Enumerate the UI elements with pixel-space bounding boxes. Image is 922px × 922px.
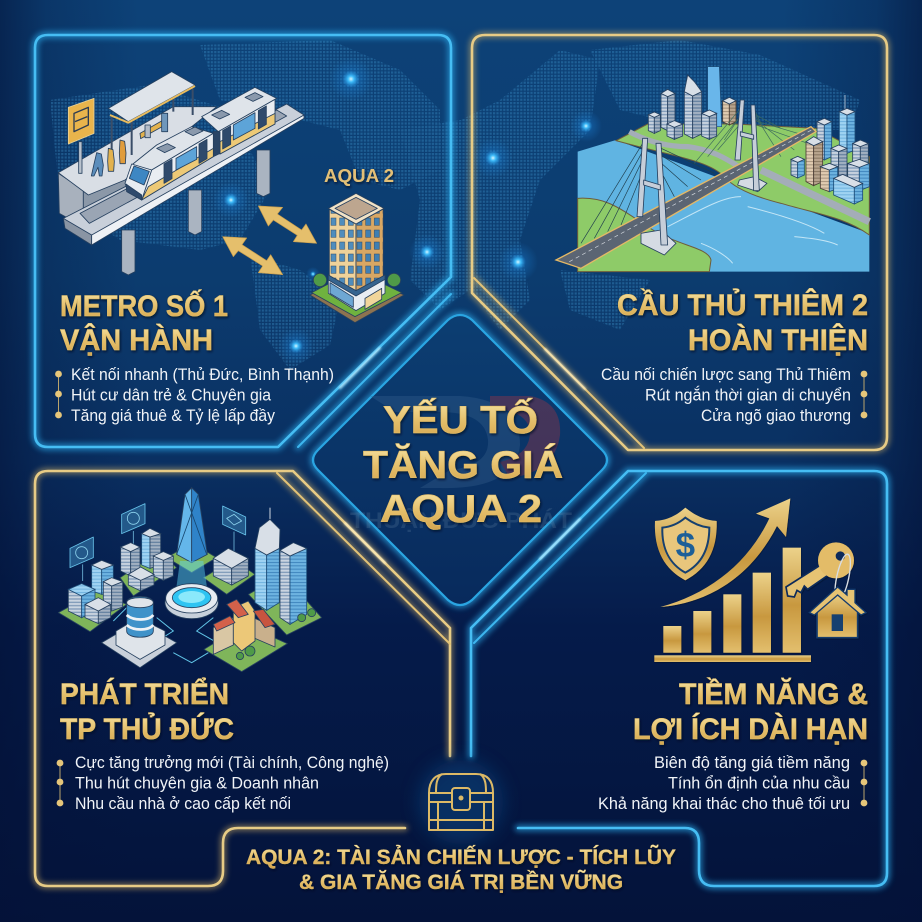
bridge towers	[637, 100, 767, 255]
heading: TIỀM NĂNG &	[679, 677, 868, 711]
bullet list: Cực tăng trưởng mới (Tài chính, Công nghệ)	[75, 753, 389, 772]
bullet list	[57, 753, 389, 813]
center title	[363, 397, 563, 531]
city skyline right	[791, 95, 869, 204]
panel: metro so 1	[35, 35, 451, 447]
bridge deck	[556, 127, 816, 268]
center title: YẾU TỐ	[383, 397, 538, 442]
heading	[60, 677, 234, 746]
world map dot pattern	[50, 40, 860, 370]
panel: tiem nang va loi ich dai han	[471, 471, 887, 886]
illustration: smart city	[58, 488, 322, 672]
illustration: aqua 2 tower	[310, 193, 404, 323]
rising arrow	[660, 498, 790, 607]
center title: AQUA 2	[380, 488, 542, 531]
heading: TP THỦ ĐỨC	[60, 712, 234, 746]
illustration: elevated metro train and station	[58, 72, 304, 275]
center title: TĂNG GIÁ	[363, 443, 563, 487]
watermark text: THUẬN ĐỨC PHÁT	[350, 508, 573, 533]
center diamond	[313, 315, 607, 605]
bullet list: Hút cư dân trẻ & Chuyên gia	[71, 386, 272, 404]
bullet list: Biên độ tăng giá tiềm năng	[654, 753, 850, 772]
bullet list: Thu hút chuyên gia & Doanh nhân	[75, 774, 319, 792]
bullet list: Tính ổn định của nhu cầu	[668, 774, 850, 792]
stay cables back	[581, 107, 808, 243]
watermark logo	[370, 396, 560, 488]
bullet list: Kết nối nhanh (Thủ Đức, Bình Thạnh)	[71, 365, 334, 384]
house	[809, 587, 866, 638]
hologram beam	[175, 561, 208, 598]
station sign	[68, 98, 94, 173]
illustration: growth chart, shield, key and house	[654, 498, 866, 662]
panel border	[471, 471, 887, 886]
shield icon: $	[676, 526, 695, 565]
city skyline back	[648, 67, 736, 139]
panel: cau thu thiem 2	[472, 35, 887, 450]
heading: VẬN HÀNH	[60, 323, 213, 357]
bullet list: Cầu nối chiến lược sang Thủ Thiêm	[601, 365, 851, 384]
striped hub building	[116, 596, 165, 659]
campus building with red roofs	[213, 599, 316, 660]
heading	[60, 289, 228, 357]
bullet list	[55, 365, 334, 425]
arrows: two-way connection	[223, 206, 317, 275]
heading: METRO SỐ 1	[60, 289, 228, 323]
shelter	[108, 72, 195, 155]
bullet list: Khả năng khai thác cho thuê tối ưu	[598, 794, 850, 813]
panel border	[35, 471, 450, 886]
bullet list: Cửa ngõ giao thương	[701, 406, 851, 425]
train	[125, 87, 277, 200]
bullet list: Rút ngắn thời gian di chuyển	[645, 386, 851, 404]
key	[786, 542, 854, 602]
heading: LỢI ÍCH DÀI HẠN	[633, 712, 868, 746]
glowing lights	[213, 57, 602, 364]
bars	[654, 548, 811, 662]
innovation ring	[165, 584, 218, 619]
heading	[633, 677, 868, 746]
city bases	[58, 543, 322, 672]
label: aqua 2: AQUA 2	[324, 166, 394, 186]
footer statement: AQUA 2: TÀI SẢN CHIẾN LƯỢC - TÍCH LŨY	[246, 845, 676, 869]
panel border	[35, 35, 451, 447]
bullet list	[598, 753, 867, 813]
signal icons	[70, 504, 246, 581]
footer statement	[246, 845, 676, 894]
panel: phat trien tp thu duc	[35, 471, 450, 886]
shield icon	[655, 508, 717, 580]
bullet list	[601, 365, 867, 425]
left buildings	[68, 528, 173, 624]
icon: treasure chest	[419, 760, 503, 844]
bullet list: Nhu cầu nhà ở cao cấp kết nối	[75, 794, 291, 813]
bullet list: Tăng giá thuê & Tỷ lệ lấp đầy	[71, 406, 275, 425]
heading: HOÀN THIỆN	[688, 323, 868, 357]
panel border	[472, 35, 887, 450]
heading: CẦU THỦ THIÊM 2	[617, 288, 868, 322]
circuit lines	[113, 601, 220, 663]
right buildings	[213, 508, 307, 624]
central spire	[177, 488, 207, 563]
heading: PHÁT TRIỂN	[60, 677, 229, 711]
illustration: cable-stayed bridge	[556, 67, 869, 272]
footer statement: & GIA TĂNG GIÁ TRỊ BỀN VỮNG	[299, 870, 623, 894]
heading	[617, 288, 868, 357]
passengers	[91, 140, 126, 176]
